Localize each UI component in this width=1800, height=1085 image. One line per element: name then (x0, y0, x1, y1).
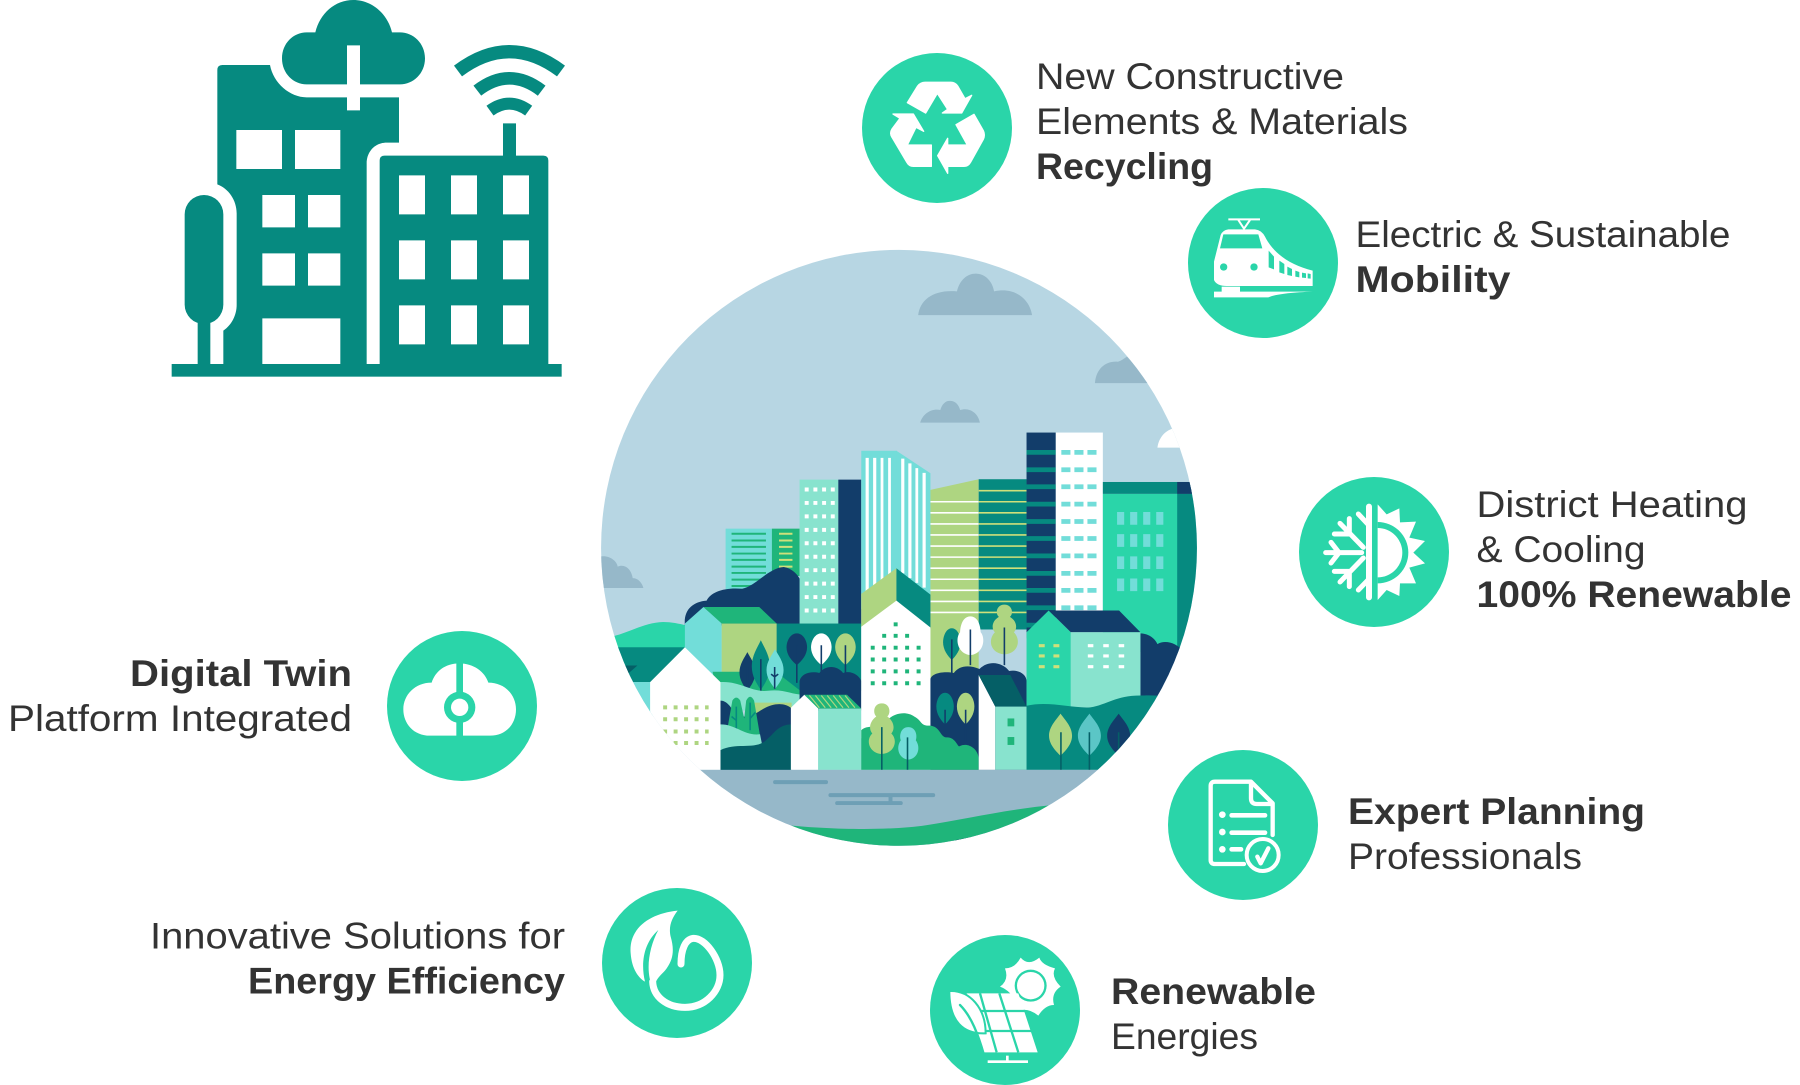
hill navy (685, 567, 800, 626)
label: recycling: New Constructive (1036, 56, 1344, 97)
left green house (685, 607, 722, 677)
green bush and front trees (861, 713, 979, 770)
item: energy efficiency (150, 888, 752, 1038)
label: district heating: 100% Renewable (1476, 574, 1792, 615)
green bank (791, 806, 1048, 846)
clouds (590, 274, 1151, 588)
label: recycling: Recycling (1036, 146, 1213, 187)
small house (791, 695, 818, 770)
tower C (861, 451, 897, 609)
icon: solar panel, leaf and sun (930, 935, 1080, 1085)
icon: recycling (862, 53, 1012, 203)
label: district heating: & Cooling (1476, 529, 1646, 570)
mid hills (720, 682, 804, 711)
trees by green house (787, 633, 856, 683)
label: renewable energies (1111, 971, 1316, 1057)
item: recycling (862, 53, 1408, 203)
back buildings (726, 529, 772, 596)
tower F (1103, 494, 1178, 652)
label: mobility: Mobility (1356, 259, 1511, 300)
tower B (800, 480, 838, 624)
label: digital twin (8, 653, 352, 739)
label: mobility (1356, 214, 1730, 300)
item: digital twin (8, 631, 537, 781)
illustration: green city in a circle (590, 240, 1210, 860)
label: digital twin: Digital Twin (130, 653, 352, 694)
label: expert planning: Professionals (1348, 836, 1582, 877)
label: renewable energies: Energies (1111, 1016, 1258, 1057)
label: mobility: Electric & Sustainable (1356, 214, 1730, 255)
house with dark roof (979, 675, 995, 770)
navy bushes (800, 667, 861, 711)
icon: smart building with cloud and wifi (172, 0, 562, 377)
left hills (614, 622, 685, 652)
tower D (930, 479, 979, 679)
label: energy efficiency (150, 916, 565, 1002)
icon: cloud with node (387, 631, 537, 781)
front right hill with trees (1026, 695, 1158, 770)
item: district heating and cooling (1299, 477, 1792, 627)
navy block with trees (930, 663, 1027, 770)
label: energy efficiency: Innovative Solutions for (150, 916, 565, 956)
icon: snowflake and sun (1299, 477, 1449, 627)
item: expert planning (1168, 750, 1645, 900)
label: expert planning: Expert Planning (1348, 791, 1645, 832)
center house (861, 568, 896, 628)
white house with dots (650, 647, 720, 770)
road (700, 770, 1098, 846)
tower E (1027, 433, 1056, 638)
right houses (1140, 633, 1183, 697)
icon: checked document (1168, 750, 1318, 900)
label: recycling: Elements & Materials (1036, 101, 1408, 142)
label: energy efficiency: Energy Efficiency (248, 960, 565, 1002)
label: digital twin: Platform Integrated (8, 698, 352, 739)
item: mobility (1188, 188, 1730, 338)
label: district heating: District Heating (1476, 484, 1748, 525)
label: renewable energies: Renewable (1111, 971, 1316, 1012)
icon: train (1188, 188, 1338, 338)
icon: leaf swirl (602, 888, 752, 1038)
label: district heating (1476, 484, 1792, 615)
item: renewable energies (930, 935, 1316, 1085)
label: expert planning (1348, 791, 1645, 877)
label: recycling (1036, 56, 1408, 187)
